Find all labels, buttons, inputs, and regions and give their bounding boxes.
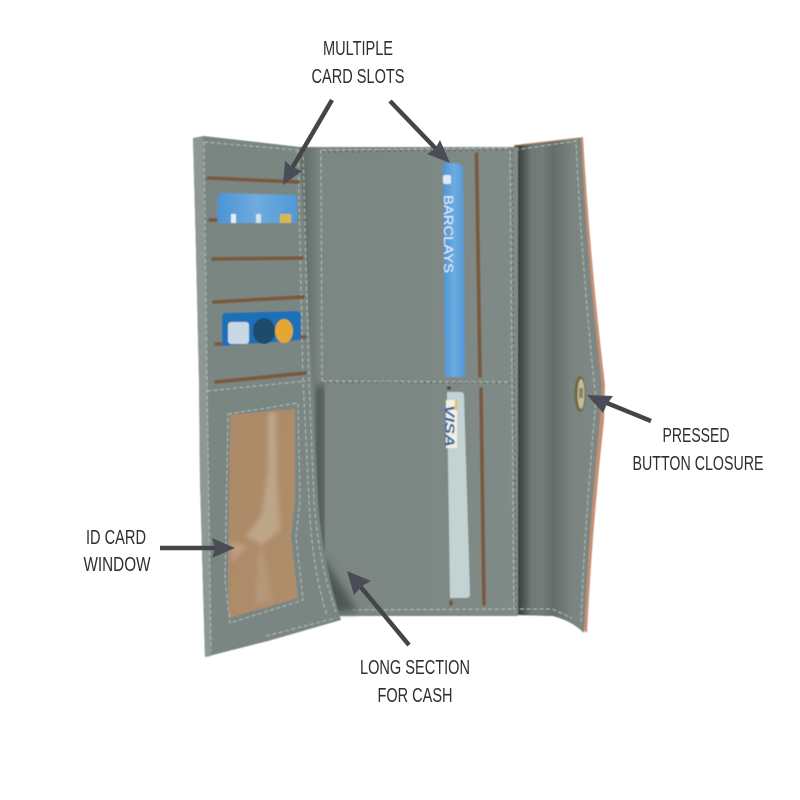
Barclays eagle icon [443, 175, 451, 184]
card slot: third [213, 258, 302, 259]
ID card window [225, 403, 303, 623]
label: ID card window: WINDOW [84, 554, 151, 576]
card slot: top [208, 178, 298, 182]
label: multiple card slots [312, 38, 404, 88]
card slot: fourth [214, 297, 303, 302]
label: long section for cash: FOR CASH [378, 685, 452, 707]
left flap [193, 136, 341, 657]
label: pressed button closure: PRESSED [662, 425, 730, 447]
arrow: to cash section [347, 571, 409, 645]
label: ID card window [84, 527, 151, 576]
arrow: to left card slots [283, 100, 332, 185]
card in slot: bank card [216, 311, 305, 346]
card brand: Barclays: BARCLAYS [441, 195, 456, 273]
card: Visa [442, 392, 470, 598]
label: long section for cash [360, 657, 470, 707]
arrow: to button closure [587, 395, 651, 421]
arrow: to Barclays card slot [390, 101, 450, 163]
label: multiple card slots: CARD SLOTS [312, 66, 404, 88]
card in slot: blue debit card [210, 193, 297, 223]
label: pressed button closure [632, 425, 764, 475]
arrow: to ID card window [160, 538, 235, 558]
card slot: fifth [216, 373, 305, 382]
label: ID card window: ID CARD [86, 527, 146, 549]
card brand: Visa: VISA [442, 405, 458, 447]
label: multiple card slots: MULTIPLE [323, 38, 393, 60]
right flap [514, 137, 605, 633]
center panel [298, 147, 518, 616]
snap button [574, 376, 586, 412]
card: Barclays [441, 163, 465, 377]
vertical card slots [447, 154, 484, 604]
wallet [193, 136, 605, 657]
label: long section for cash: LONG SECTION [360, 657, 470, 679]
